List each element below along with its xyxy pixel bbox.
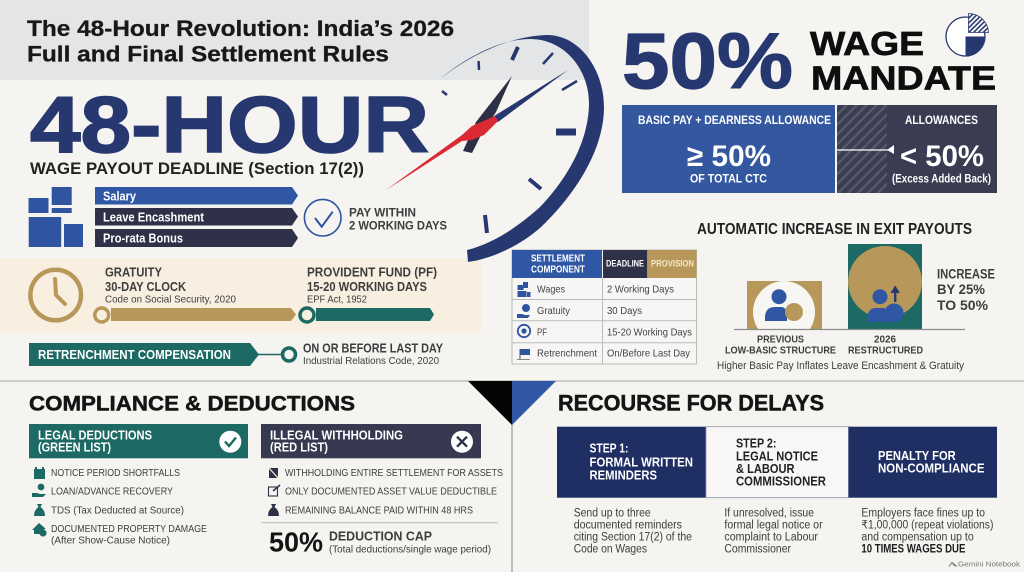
icon: damaged house: [32, 523, 47, 537]
icon: check circle: [304, 199, 341, 236]
title: Full and Final Settlement Rules: [27, 42, 389, 66]
banner: legal deductions: LEGAL DEDUCTIONS: [38, 428, 152, 442]
icon: pie chart: [946, 13, 988, 56]
provident fund text: EPF Act, 1952: [307, 294, 367, 306]
illegal withholding list: [268, 467, 503, 516]
banner: legal deductions: (GREEN LIST): [38, 441, 111, 455]
increase callout: BY 25%: [937, 282, 985, 297]
penalty description: 10 TIMES WAGES DUE: [861, 544, 966, 556]
wage components arrows: [95, 187, 298, 247]
legal deductions list: NOTICE PERIOD SHORTFALLS: [51, 468, 180, 479]
callout: deduction cap: [269, 527, 491, 558]
heading: wage mandate: [810, 26, 996, 97]
icon: wage blocks: [28, 187, 83, 247]
chart labels: Higher Basic Pay Inflates Leave Encashment & Gratuity: [717, 360, 964, 372]
increase callout: INCREASE: [937, 266, 995, 281]
icon: money bag: [268, 504, 279, 516]
callout: deduction cap: (Total deductions/single wage period): [329, 543, 491, 555]
callout: deduction cap: 50%: [269, 527, 323, 558]
legal deductions list: LOAN/ADVANCE RECOVERY: [51, 487, 173, 498]
chart labels: 2026: [874, 335, 896, 346]
retrenchment compensation banner: [29, 343, 296, 366]
step 2 description: complaint to Labour: [724, 532, 818, 544]
icon: gratuity clock: [30, 270, 81, 320]
table: settlement components: 15-20 Working Days: [607, 327, 692, 339]
table: settlement components: On/Before Last Day: [607, 348, 691, 360]
table: settlement components: [512, 250, 696, 364]
heading: wage mandate: MANDATE: [811, 60, 996, 97]
step 1 description: Code on Wages: [574, 544, 647, 556]
divider triangles: [468, 381, 556, 425]
icon: clock dial: [386, 35, 604, 262]
step 2 description: If unresolved, issue: [724, 508, 814, 520]
step 1 box: FORMAL WRITTEN: [590, 455, 693, 470]
chart labels: RESTRUCTURED: [848, 345, 923, 356]
table: settlement components: PF: [537, 327, 547, 339]
wage components arrows: Pro-rata Bonus: [103, 232, 183, 246]
step 2 description: [724, 508, 823, 556]
icon: edit form: [268, 485, 280, 496]
illegal withholding list: ONLY DOCUMENTED ASSET VALUE DEDUCTIBLE: [285, 487, 497, 498]
panel: basic pay share: [622, 105, 835, 193]
icon: loan hand: [32, 484, 46, 497]
step 2 box: & LABOUR: [736, 461, 795, 476]
legal deductions list: (After Show-Cause Notice): [51, 536, 170, 547]
table: settlement components: DEADLINE: [606, 259, 644, 270]
callout: deduction cap: DEDUCTION CAP: [329, 529, 432, 544]
panel: allowances share: ALLOWANCES: [905, 115, 978, 127]
panel: allowances share: [837, 105, 997, 193]
table: settlement components: Gratuity: [537, 305, 571, 317]
banner: illegal withholding: (RED LIST): [270, 441, 328, 455]
legal deductions list: [32, 467, 207, 547]
gratuity text: Code on Social Security, 2020: [105, 294, 236, 306]
heading: compliance and deductions: COMPLIANCE & DEDUCTIONS: [29, 392, 355, 416]
banner: illegal withholding: ILLEGAL WITHHOLDING: [270, 428, 403, 442]
panel: basic pay share: BASIC PAY + DEARNESS ALLOWANCE: [638, 115, 831, 127]
heading: recourse for delays: RECOURSE FOR DELAYS: [558, 391, 824, 416]
chart baseline: [734, 328, 965, 330]
step 1 box: [557, 427, 706, 498]
subheading: wage payout deadline: WAGE PAYOUT DEADLINE (Section 17(2)): [30, 159, 364, 178]
table: settlement components: Retrenchment: [537, 348, 597, 360]
penalty description: [861, 508, 994, 556]
step 1 description: [574, 508, 692, 556]
provident fund timeline bar: [300, 308, 434, 322]
step 1 box: STEP 1:: [590, 441, 628, 456]
chart: previous low-basic structure: [747, 281, 822, 329]
pay within text: PAY WITHIN: [349, 206, 416, 220]
title: The 48-Hour Revolution: India’s 2026: [27, 16, 454, 41]
step 1 description: Send up to three: [574, 508, 651, 520]
banner: legal deductions: [29, 424, 248, 458]
table: settlement components: COMPONENT: [531, 265, 585, 276]
banner: illegal withholding: [261, 424, 481, 458]
table: settlement components: PROVISION: [651, 259, 694, 270]
provident fund text: [307, 266, 437, 306]
watermark: Gemini Notebook: Gemini Notebook: [958, 560, 1020, 569]
wage components arrows: Salary: [103, 190, 136, 204]
panel: basic pay share: OF TOTAL CTC: [690, 174, 767, 186]
wage components arrows: Leave Encashment: [103, 210, 205, 224]
title: [27, 16, 454, 66]
penalty description: ₹1,00,000 (repeat violations): [861, 519, 994, 531]
step 1 description: citing Section 17(2) of the: [574, 532, 692, 544]
legal deductions list: DOCUMENTED PROPERTY DAMAGE: [51, 524, 207, 535]
penalty description: and compensation up to: [861, 532, 974, 544]
chart labels: LOW-BASIC STRUCTURE: [725, 345, 836, 356]
step 1 box: REMINDERS: [590, 467, 657, 482]
legal deductions list: TDS (Tax Deducted at Source): [51, 505, 184, 516]
step 2 box: COMMISSIONER: [736, 474, 827, 489]
illegal withholding list: REMAINING BALANCE PAID WITHIN 48 HRS: [285, 505, 473, 516]
heading: 48-hour: 48-HOUR: [30, 80, 429, 169]
icon: wages: [518, 282, 530, 297]
step 2 box: LEGAL NOTICE: [736, 448, 818, 463]
increase callout: TO 50%: [937, 298, 988, 313]
provident fund text: 15-20 WORKING DAYS: [307, 280, 427, 294]
increase callout: [937, 266, 995, 313]
penalty box: NON-COMPLIANCE: [878, 461, 985, 476]
chart: 2026 restructured: [848, 244, 922, 329]
retrenchment deadline text: Industrial Relations Code, 2020: [303, 355, 439, 367]
step 2 box: [706, 427, 848, 498]
icon: money bag: [34, 504, 45, 516]
panel: basic pay share: ≥ 50%: [687, 140, 771, 173]
gratuity timeline bar: [95, 308, 296, 322]
penalty box: [848, 427, 997, 498]
retrenchment deadline text: ON OR BEFORE LAST DAY: [303, 341, 444, 355]
panel: allowances share: (Excess Added Back): [892, 174, 991, 186]
retrenchment compensation banner: RETRENCHMENT COMPENSATION: [38, 348, 231, 362]
gratuity text: [105, 266, 236, 306]
table: settlement components: 30 Days: [607, 305, 642, 317]
icon: calendar: [34, 467, 45, 479]
chart labels: [717, 335, 964, 372]
icon: retrenchment flag: [517, 349, 530, 360]
heading: automatic increase: AUTOMATIC INCREASE IN EXIT PAYOUTS: [697, 221, 972, 238]
penalty box: PENALTY FOR: [878, 448, 956, 463]
penalty description: Employers face fines up to: [861, 508, 985, 520]
gratuity text: GRATUITY: [105, 266, 163, 280]
pay within text: 2 WORKING DAYS: [349, 218, 447, 232]
table: settlement components: Wages: [537, 284, 565, 296]
icon: blocked document: [268, 467, 279, 479]
retrenchment deadline text: [303, 341, 444, 367]
chart labels: PREVIOUS: [757, 335, 804, 346]
icon: pf: [518, 325, 530, 337]
table: settlement components: SETTLEMENT: [531, 254, 585, 265]
table: settlement components: 2 Working Days: [607, 284, 674, 296]
step 2 description: formal legal notice or: [724, 519, 823, 531]
provident fund text: PROVIDENT FUND (PF): [307, 266, 437, 280]
step 2 description: Commissioner: [724, 544, 791, 556]
icon: gratuity: [517, 304, 530, 318]
pay within text: [349, 206, 447, 232]
heading: 50%: 50%: [622, 16, 793, 105]
heading: wage mandate: WAGE: [810, 26, 924, 63]
illegal withholding list: WITHHOLDING ENTIRE SETTLEMENT FOR ASSETS: [285, 468, 503, 479]
step 1 description: documented reminders: [574, 519, 682, 531]
gratuity text: 30-DAY CLOCK: [105, 280, 186, 294]
step 2 box: STEP 2:: [736, 435, 776, 450]
panel: allowances share: < 50%: [900, 140, 984, 173]
